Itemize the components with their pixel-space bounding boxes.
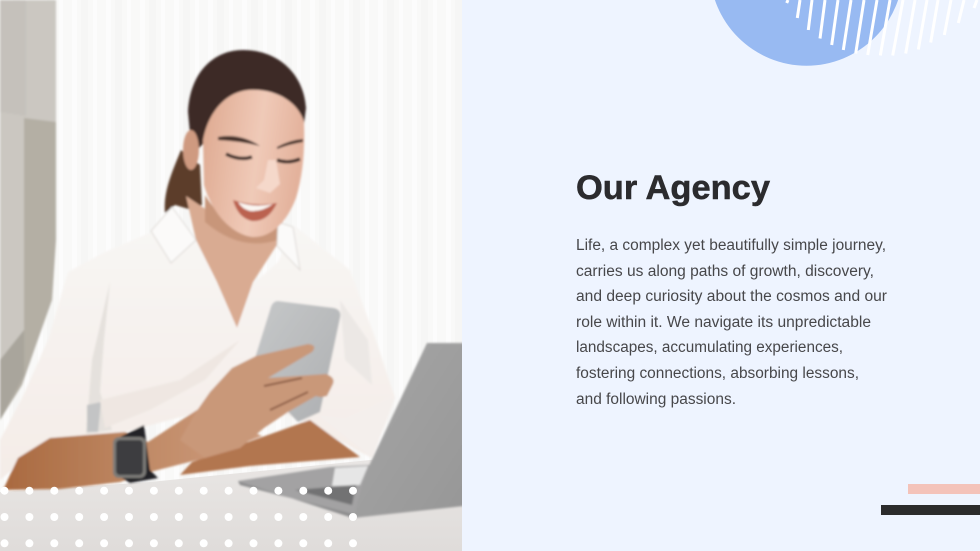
finger creases [264,378,308,410]
body paragraph: and deep curiosity about the cosmos and our [576,288,887,305]
hair [188,50,306,155]
dot pattern over photo [0,487,357,547]
body paragraph: role within it. We navigate its unpredictable [576,314,871,331]
laptop base [238,465,370,518]
smartwatch [118,425,158,483]
torso folds [100,346,233,426]
near forearm [3,408,262,490]
concrete pillar [0,0,56,420]
body paragraph: fostering connections, absorbing lessons, [576,365,859,382]
eyebrows [218,136,260,146]
eyes [226,154,252,158]
dark accent bar [881,505,980,515]
pink accent bar [908,484,980,494]
body paragraph: landscapes, accumulating experiences, [576,339,843,356]
under-chin shadow [205,195,282,243]
table [0,460,462,551]
decorative white stripes [787,0,977,56]
phone [255,301,340,422]
right panel background [462,0,980,551]
woman figure [0,50,464,518]
collar [151,207,196,263]
arm gap shadow [87,402,101,432]
face [203,90,304,237]
body paragraph: and following passions. [576,391,736,408]
body paragraph [576,237,887,408]
ear [183,130,199,170]
laptop lid [353,343,464,518]
photo: woman using a phone at a laptop [0,0,464,551]
body paragraph: carries us along paths of growth, discovery, [576,263,874,280]
decorative blue circle [710,0,903,66]
shirt torso and sleeves [0,226,395,480]
nose [256,160,280,193]
curtain backdrop [0,0,462,500]
mouth [233,200,277,221]
hand [180,344,334,458]
title: Our Agency [576,169,770,207]
right collar [277,222,300,270]
right shoulder fold [342,305,370,381]
far forearm [180,420,360,475]
right cuff shade [318,396,395,458]
ponytail [165,150,202,213]
sleeve fold shadow [87,293,111,433]
body paragraph: Life, a complex yet beautifully simple journey, [576,237,886,254]
neck [186,196,285,328]
